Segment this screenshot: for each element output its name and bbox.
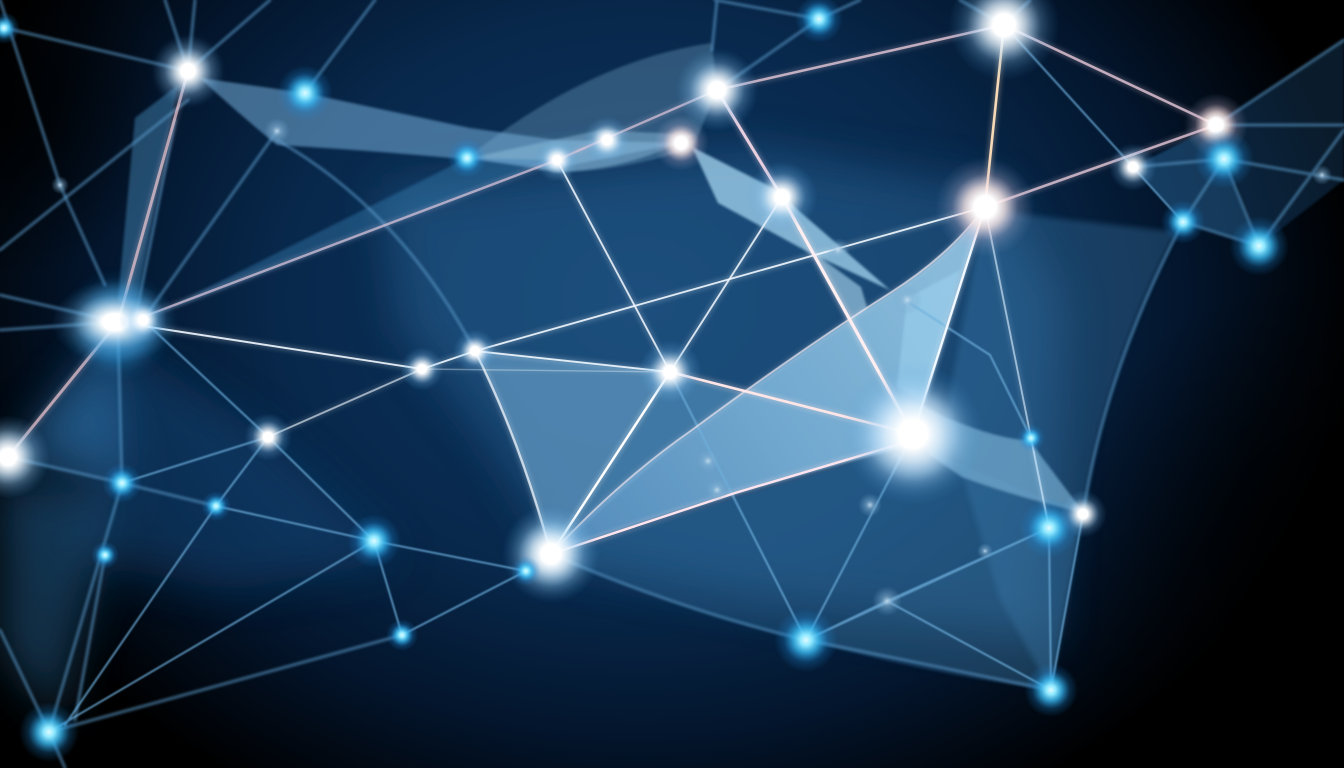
node: ribbon cyan [447, 138, 487, 178]
glow: edge [0, 433, 32, 481]
node: dim lower [872, 586, 902, 616]
node: small near hub [511, 556, 541, 586]
node: right cyan low [1161, 200, 1205, 244]
panel: ribbon fold [810, 250, 867, 322]
glow: right hub [961, 183, 1009, 231]
node: far right white [1184, 93, 1248, 157]
panel: right ribbon [897, 387, 1084, 513]
node: bottom-left cyan [19, 702, 79, 762]
glow: left hub [80, 287, 156, 363]
node: dim 4 [892, 285, 922, 315]
node: bottom hub [501, 504, 601, 604]
node: dim cyan [1017, 424, 1045, 452]
sheet: central blue field [380, 150, 1060, 640]
soft background sheets [0, 150, 1060, 720]
node: ribbon white 2 [583, 116, 631, 164]
panel: top fold [467, 43, 717, 172]
node: edge white [0, 415, 50, 499]
panel: left fold [118, 85, 178, 310]
node: top-left white [152, 35, 224, 107]
node: dim ribbon [264, 118, 290, 144]
panel: center-right facet [551, 372, 747, 554]
node: center [638, 340, 702, 404]
node: right cyan [1194, 129, 1254, 189]
panel: top-right cluster [1133, 125, 1259, 246]
panel: band to left hub [143, 158, 557, 320]
node: right white [1109, 143, 1157, 191]
right sheet soft panel [945, 210, 1176, 690]
node: far right cyan [1229, 216, 1289, 276]
node: center upper [746, 161, 818, 233]
glow: top-right hub [976, 0, 1032, 53]
node: lower-left cyan [102, 463, 142, 503]
node: dim 5 [826, 238, 850, 262]
node: left hub white [119, 296, 167, 344]
sheet: far-left blue field [0, 480, 115, 720]
node: bottom small cyan [386, 619, 418, 651]
node: dim 2 [705, 478, 729, 502]
glow: top left [166, 49, 210, 93]
node: left hub cyan [51, 280, 179, 364]
node: top-left edge cyan [0, 12, 20, 44]
node: ribbon white 3 [653, 115, 709, 171]
node: bottom cyan [774, 608, 838, 672]
node: mid-left white [400, 347, 444, 391]
node: top right large [948, 0, 1060, 81]
node: right hub [935, 157, 1035, 257]
panel: large lower sheet [551, 445, 1083, 690]
panel: bright wing [551, 207, 985, 554]
panel: lower fold highlight [470, 130, 695, 172]
node: bright hub [841, 362, 985, 506]
node: dim far right [1312, 165, 1332, 185]
panel: diagonal ribbon [692, 147, 890, 290]
mesh lines: white highlights [8, 25, 1216, 554]
node: dim far left [51, 176, 69, 194]
node: small cyan left [91, 541, 119, 569]
sheet: left hub field [20, 340, 120, 470]
node: right cyan mid [1019, 498, 1079, 558]
panel: center-left facet [475, 351, 670, 554]
node: dim 3 [696, 449, 720, 473]
node: dim 1 [858, 493, 882, 517]
panel: right sheet [945, 210, 1176, 690]
node: ribbon white 1 [535, 138, 579, 182]
bloom around nodes [0, 0, 1032, 582]
panel: far-right strip [1216, 40, 1344, 246]
node: mid white [453, 329, 497, 373]
glow: bottom hub [523, 526, 579, 582]
node: cyan [347, 514, 401, 568]
glow: lower hub [869, 390, 957, 478]
sheet: lower-left blue field [80, 340, 400, 590]
node: small cyan [201, 491, 231, 521]
node: left white [244, 413, 292, 461]
node: right white mid [1059, 490, 1107, 538]
node: dim 6 [977, 543, 993, 559]
node: bottom-right cyan [1024, 663, 1078, 717]
node: top-left cyan [277, 65, 333, 121]
panel: lower-right facet [806, 528, 1051, 690]
mesh lines: blue strands [49, 25, 1183, 732]
panel: lower-left wedge [8, 322, 122, 483]
line glow layer [8, 25, 1216, 554]
panel: hub fold [897, 270, 960, 403]
glow: upper center [695, 68, 739, 112]
panel: upper ribbon [200, 78, 681, 168]
node: top cyan [795, 0, 843, 43]
node: upper center [675, 48, 759, 132]
